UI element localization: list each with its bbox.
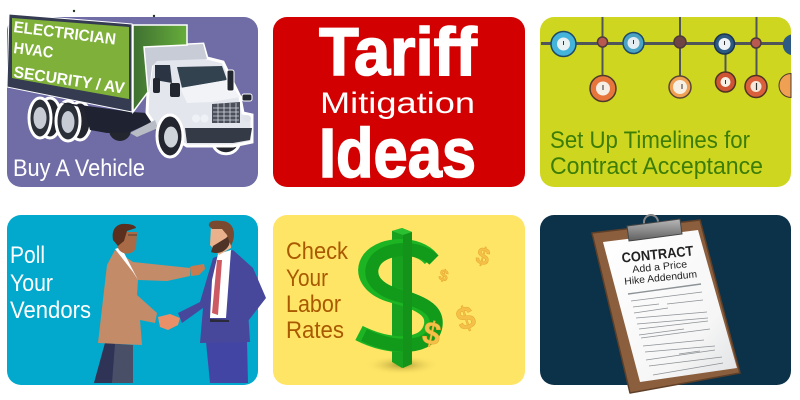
caption: labor rates: Rates — [286, 317, 344, 344]
caption: poll your vendors: Poll — [10, 242, 45, 269]
caption: labor rates — [286, 238, 349, 344]
contract text lines — [628, 284, 723, 375]
truck chassis — [58, 102, 157, 133]
handshake hands — [158, 314, 180, 330]
icon: box truck — [7, 10, 252, 157]
contract heading: CONTRACT — [621, 242, 695, 266]
timeline diagram — [541, 17, 791, 102]
icon: gold dollar signs: $ — [473, 242, 494, 272]
truck cab — [144, 44, 252, 146]
caption: labor rates: Labor — [286, 291, 341, 318]
blue clocks — [551, 32, 791, 56]
contract heading: Add a Price — [632, 259, 688, 276]
icon: gold dollar signs: $ — [419, 314, 444, 353]
title text: Mitigation — [320, 87, 475, 120]
man right — [178, 221, 266, 383]
panel: contract — [540, 215, 791, 393]
title text: Ideas — [319, 114, 476, 192]
shadow — [364, 355, 440, 375]
icon: gold dollar signs: $ — [452, 298, 480, 338]
timeline caption — [550, 127, 763, 180]
truck second front wheel — [212, 141, 240, 154]
label: buy a vehicle: Buy A Vehicle — [13, 155, 145, 182]
icon: gold dollar signs — [419, 242, 494, 353]
panel: title — [273, 14, 525, 192]
truck rear wheels — [29, 98, 131, 141]
icon: gold dollar signs: $ — [437, 267, 450, 286]
panel: buy a vehicle — [7, 10, 258, 187]
truck front wheel — [157, 115, 183, 157]
caption: labor rates: Your — [286, 265, 328, 292]
man left — [94, 224, 205, 383]
panel: poll your vendors — [7, 215, 266, 385]
illustration: handshake — [94, 221, 266, 383]
timeline caption: Set Up Timelines for — [550, 127, 750, 154]
panel: timelines — [540, 17, 791, 187]
box text: trades: HVAC — [13, 40, 55, 62]
truck cargo box — [7, 10, 187, 112]
junction nodes — [598, 36, 761, 48]
icon: big dollar sign — [359, 228, 436, 368]
title text: Tariff — [319, 14, 477, 90]
truck steps — [130, 120, 158, 137]
contract heading: Hike Addendum — [624, 269, 698, 288]
caption: labor rates: Check — [286, 238, 349, 265]
contract heading — [621, 242, 698, 288]
box text: trades — [12, 19, 126, 98]
panel: labor rates — [273, 215, 525, 385]
box text: trades: SECURITY / AV — [12, 64, 126, 98]
caption: poll your vendors: Your — [10, 270, 53, 297]
title text — [319, 14, 477, 192]
orange clocks — [590, 72, 791, 102]
clipboard clip — [627, 215, 682, 241]
box text: trades: ELECTRICIAN — [13, 19, 117, 49]
timeline caption: Contract Acceptance — [550, 153, 763, 180]
icon: clipboard — [592, 215, 740, 393]
caption: poll your vendors — [10, 242, 91, 324]
caption: poll your vendors: Vendors — [10, 297, 91, 324]
